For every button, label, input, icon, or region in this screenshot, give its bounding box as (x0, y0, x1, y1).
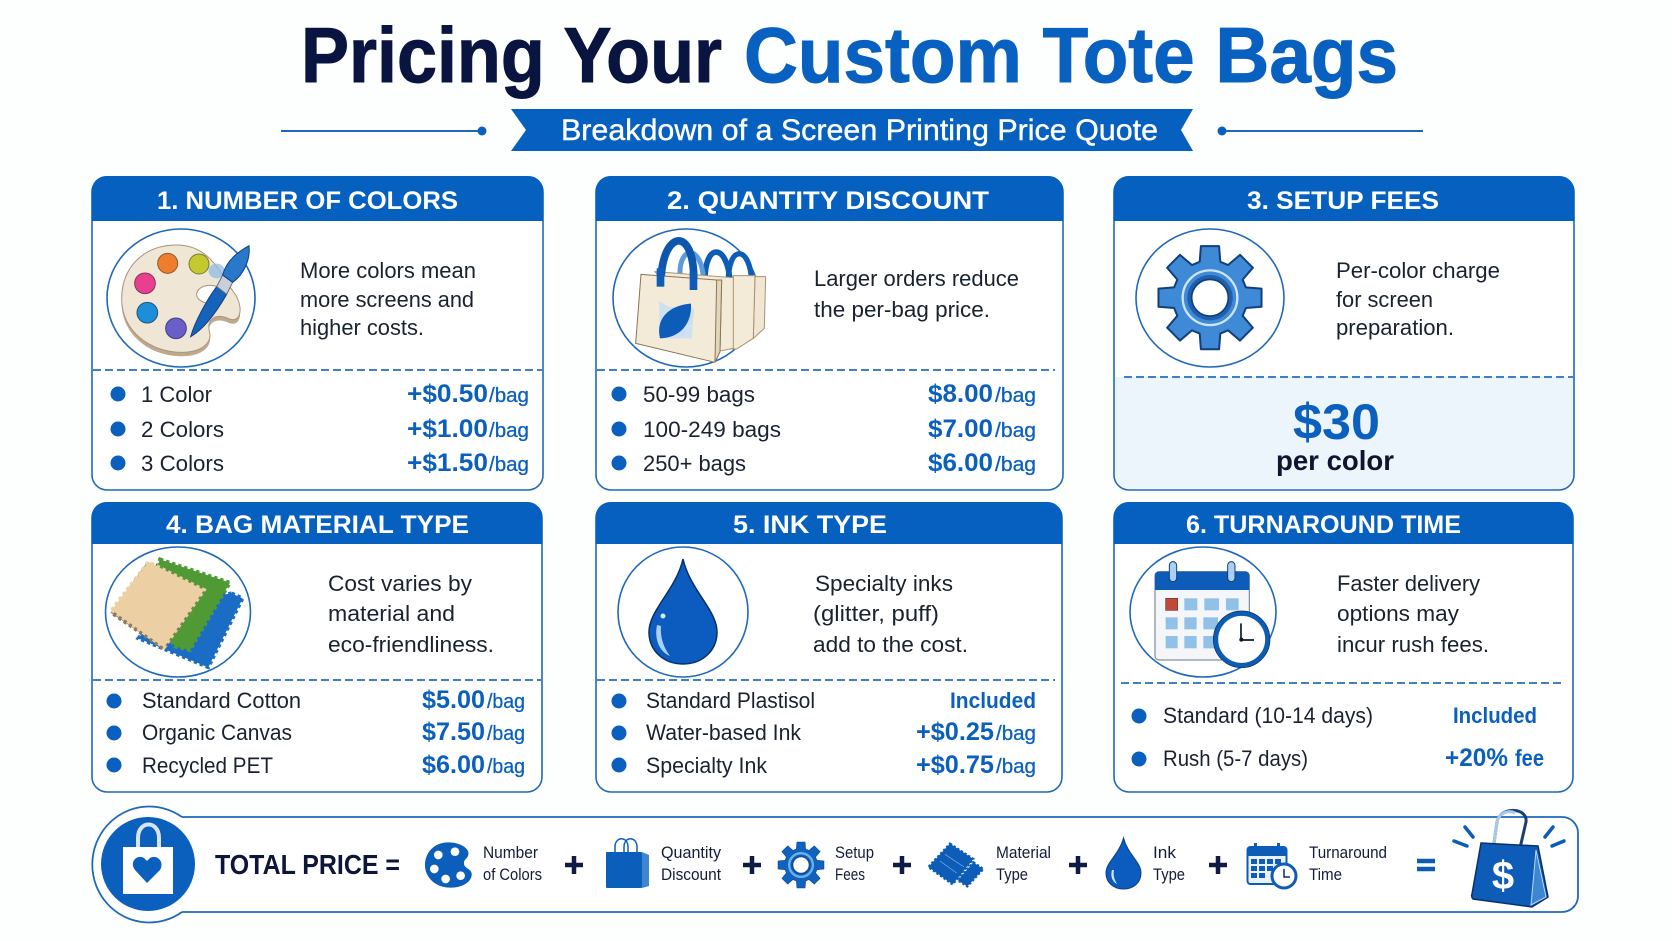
term: ink type: Ink (1153, 843, 1176, 862)
callout: setup price: per color (1276, 445, 1394, 476)
icon: ink drop (1106, 838, 1141, 889)
description text: material and (328, 601, 455, 626)
heading: quantity discount: 2. QUANTITY DISCOUNT (667, 187, 989, 215)
price rows: /bag (487, 723, 525, 745)
price rows: 250+ bags (643, 451, 746, 476)
icon: dollar shopping bag: $ (1492, 854, 1514, 898)
price rows: $6.00 (422, 751, 485, 779)
panel: bag material type (92, 502, 542, 792)
price rows: Standard (10-14 days) (1163, 703, 1373, 728)
description text: for screen (1336, 287, 1433, 312)
heading: turnaround time: 6. TURNAROUND TIME (1186, 511, 1461, 539)
icon: calendar clock (1248, 843, 1296, 888)
description text: preparation. (1336, 315, 1454, 340)
description text: options may (1337, 601, 1459, 626)
price rows: Water-based Ink (646, 720, 802, 745)
term: setup fees (835, 843, 874, 884)
formula label: TOTAL PRICE = (215, 849, 400, 880)
description text (1337, 571, 1489, 657)
heading: bag material type: 4. BAG MATERIAL TYPE (166, 511, 469, 539)
heading: setup fees: 3. SETUP FEES (1247, 187, 1439, 215)
price rows: fee (1515, 745, 1544, 771)
panel: ink type (596, 502, 1062, 792)
term: ink type (1153, 843, 1185, 884)
icon: calendar and clock (1130, 547, 1276, 677)
price rows: Standard Cotton (142, 688, 301, 713)
price rows: +$0.25 (916, 718, 994, 746)
heading: ink type: 5. INK TYPE (733, 511, 887, 539)
price rows: $7.00 (928, 415, 993, 443)
description text: add to the cost. (813, 632, 968, 657)
icon: heart tote badge (92, 806, 195, 922)
subtitle ribbon: Breakdown of a Screen Printing Price Quote (561, 114, 1158, 147)
price rows: /bag (996, 723, 1036, 745)
price rows: Specialty Ink (646, 753, 768, 778)
price rows: Included (1453, 703, 1537, 728)
icon: tote bags (613, 229, 766, 367)
description text (814, 266, 1019, 322)
icon: fabric swatches (106, 547, 250, 677)
description text: Per-color charge (1336, 258, 1500, 283)
icon: shopping bag (606, 839, 649, 888)
price rows: /bag (487, 691, 525, 713)
price rows (1132, 703, 1544, 772)
description text: Cost varies by (328, 571, 472, 596)
description text (328, 571, 494, 657)
panel: number of colors (92, 176, 544, 490)
term: quantity discount (661, 843, 721, 884)
plus (1069, 856, 1087, 874)
term: material type: Material (996, 843, 1051, 862)
price rows: $8.00 (928, 380, 993, 408)
price rows: +$0.75 (916, 751, 994, 779)
subtitle ribbon (281, 109, 1423, 151)
price rows: +20% (1445, 744, 1508, 772)
price rows: Included (950, 688, 1036, 713)
price rows: /bag (995, 454, 1036, 476)
icon: gear (1136, 229, 1284, 367)
price rows: Recycled PET (142, 753, 273, 778)
price rows: +$1.00 (407, 415, 488, 443)
description text: higher costs. (300, 315, 424, 340)
icon: paint palette (107, 229, 255, 367)
description text (300, 258, 476, 340)
description text: the per-bag price. (814, 297, 990, 322)
title: Pricing Your (301, 11, 722, 99)
plus (743, 856, 761, 874)
description text: (glitter, puff) (813, 601, 939, 626)
price rows: /bag (489, 385, 529, 407)
price rows: /bag (487, 756, 525, 778)
term: ink type: Type (1153, 865, 1185, 884)
price rows (106, 686, 525, 779)
callout: setup price: $30 (1293, 394, 1380, 450)
plus (1209, 856, 1227, 874)
icon: palette (425, 842, 472, 888)
price rows: 50-99 bags (643, 382, 755, 407)
price rows: 100-249 bags (643, 417, 781, 442)
description text: Specialty inks (815, 571, 953, 596)
price rows (612, 688, 1036, 779)
price rows: Organic Canvas (142, 720, 292, 745)
panel: quantity discount (596, 176, 1064, 490)
icon: dollar shopping bag (1454, 810, 1564, 907)
price rows: Rush (5-7 days) (1163, 746, 1308, 771)
term: setup fees: Fees (835, 865, 865, 884)
description text: eco-friendliness. (328, 632, 494, 657)
term: turnaround time (1309, 843, 1387, 884)
description text (1336, 258, 1500, 340)
price rows (110, 380, 529, 477)
term: turnaround time: Time (1309, 865, 1342, 884)
icon: ink drop (618, 547, 748, 677)
term: number of colors: of Colors (483, 865, 542, 884)
price rows: /bag (996, 756, 1036, 778)
price rows: /bag (489, 454, 529, 476)
description text (813, 571, 968, 657)
description text: More colors mean (300, 258, 476, 283)
heading: number of colors: 1. NUMBER OF COLORS (157, 187, 458, 215)
price rows: $6.00 (928, 449, 993, 477)
price rows: /bag (995, 385, 1036, 407)
price rows: Standard Plastisol (646, 688, 815, 713)
term: quantity discount: Discount (661, 865, 721, 884)
plus (565, 856, 583, 874)
panel: turnaround time (1114, 502, 1574, 792)
term: turnaround time: Turnaround (1309, 843, 1387, 862)
description text: incur rush fees. (1337, 632, 1489, 657)
price rows: $5.00 (422, 686, 485, 714)
price rows: /bag (489, 420, 529, 442)
term: material type: Type (996, 865, 1028, 884)
price rows: $7.50 (422, 718, 485, 746)
term: quantity discount: Quantity (661, 843, 721, 862)
panel: setup fees (1114, 176, 1574, 490)
price rows (612, 380, 1036, 477)
title (301, 11, 1398, 99)
term: material type (996, 843, 1051, 884)
price rows: /bag (995, 420, 1036, 442)
formula bar (92, 806, 1578, 922)
price rows: 1 Color (141, 382, 212, 407)
price rows: 3 Colors (141, 451, 224, 476)
description text: Faster delivery (1337, 571, 1480, 596)
plus (893, 856, 911, 874)
price rows: 2 Colors (141, 417, 224, 442)
price rows: +$0.50 (407, 380, 488, 408)
description text: more screens and (300, 287, 474, 312)
equals (1417, 861, 1435, 869)
term: number of colors: Number (483, 843, 538, 862)
term: number of colors (483, 843, 542, 884)
price rows: +$1.50 (407, 449, 488, 477)
description text: Larger orders reduce (814, 266, 1019, 291)
term: setup fees: Setup (835, 843, 874, 862)
callout: setup price (1276, 394, 1394, 476)
icon: gear (778, 842, 824, 888)
icon: material swatches (928, 844, 983, 886)
title: Custom Tote Bags (744, 11, 1398, 99)
